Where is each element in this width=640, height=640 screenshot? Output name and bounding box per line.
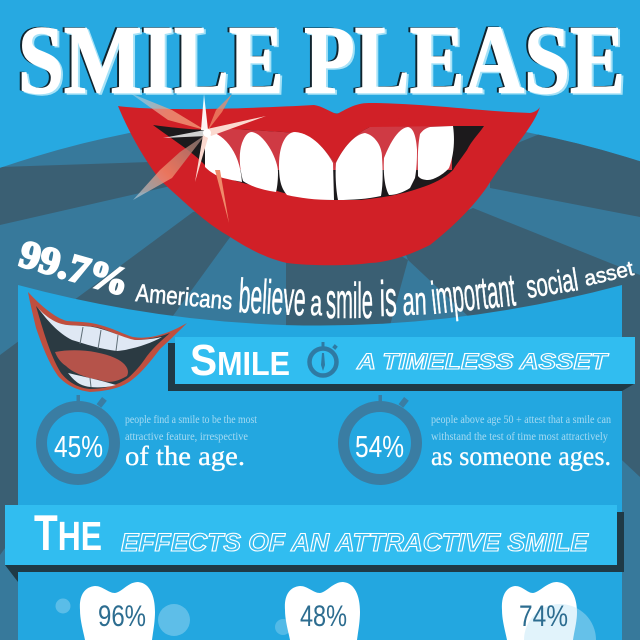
- tongue: [55, 350, 128, 382]
- header shadow: [168, 343, 634, 391]
- description: of the age.: [125, 441, 245, 471]
- headline: 99.7% Americans believe a smile is an important social asset: smile: [326, 273, 373, 329]
- description: [431, 414, 611, 471]
- headline: 99.7% Americans believe a smile is an important social asset: an: [402, 279, 427, 324]
- mouth cavity: [153, 125, 484, 200]
- description: withstand the test of time most attractively: [431, 431, 608, 443]
- icon: cartoon open mouth: [28, 292, 187, 392]
- headline: 99.7% Americans believe a smile is an important social asset: [15, 232, 636, 329]
- sparkle on tooth: [130, 93, 266, 223]
- header shadow: [5, 512, 624, 582]
- section header: Smile, a timeless asset: [168, 336, 635, 391]
- headline: 99.7% Americans believe a smile is an important social asset: asset: [582, 257, 636, 291]
- Smile label: SMILE: [190, 336, 290, 385]
- description: people find a smile to be the most: [125, 414, 258, 426]
- stopwatch ring: [42, 395, 114, 480]
- content panel: [18, 285, 622, 640]
- tooth: 48%: 48%: [300, 600, 347, 633]
- lips: [118, 103, 540, 265]
- headline: 99.7% Americans believe a smile is an important social asset: Americans: [134, 279, 234, 315]
- headline: 99.7% Americans believe a smile is an important social asset: social: [523, 261, 580, 305]
- section header: The effects of an attractive smile: [5, 505, 624, 582]
- lower teeth: [68, 373, 116, 387]
- bubbles: [56, 598, 596, 640]
- stat: 45%: [42, 395, 258, 480]
- stat: 45%: 45%: [54, 429, 103, 464]
- The label: THE: [34, 505, 102, 561]
- stat: 54%: [344, 395, 611, 480]
- description: attractive feature, irrespective: [125, 431, 248, 443]
- headline: 99.7% Americans believe a smile is an important social asset: important: [429, 263, 518, 324]
- effects text: EFFECTS OF AN ATTRACTIVE SMILE: [121, 529, 589, 557]
- header band: [5, 505, 617, 565]
- tooth: 96%: [80, 582, 155, 640]
- a timeless asset: A TIMELESS ASSET: [356, 349, 609, 374]
- gums: [215, 126, 452, 170]
- headline: 99.7% Americans believe a smile is an important social asset: is: [379, 271, 397, 327]
- stopwatch ring: [344, 395, 416, 480]
- teeth: [205, 126, 454, 200]
- header band: [175, 337, 635, 384]
- tooth: 74%: [502, 582, 577, 640]
- 99.7%: 99.7%: [15, 232, 134, 305]
- upper teeth: [38, 308, 162, 351]
- headline: 99.7% Americans believe a smile is an important social asset: believe: [237, 270, 307, 326]
- icon: stopwatch: [310, 342, 338, 376]
- headline: 99.7% Americans believe a smile is an important social asset: a: [310, 282, 323, 323]
- tooth: 74%: 74%: [519, 600, 568, 633]
- main red lips with teeth: [118, 103, 540, 265]
- tooth: 48%: [285, 582, 360, 640]
- upper lip wedge: [205, 118, 400, 163]
- tooth: 96%: 96%: [98, 600, 146, 633]
- stat: 54%: 54%: [355, 429, 404, 464]
- description: people above age 50 + attest that a smile can: [431, 414, 611, 426]
- description: as someone ages.: [431, 441, 611, 471]
- description: [125, 414, 258, 471]
